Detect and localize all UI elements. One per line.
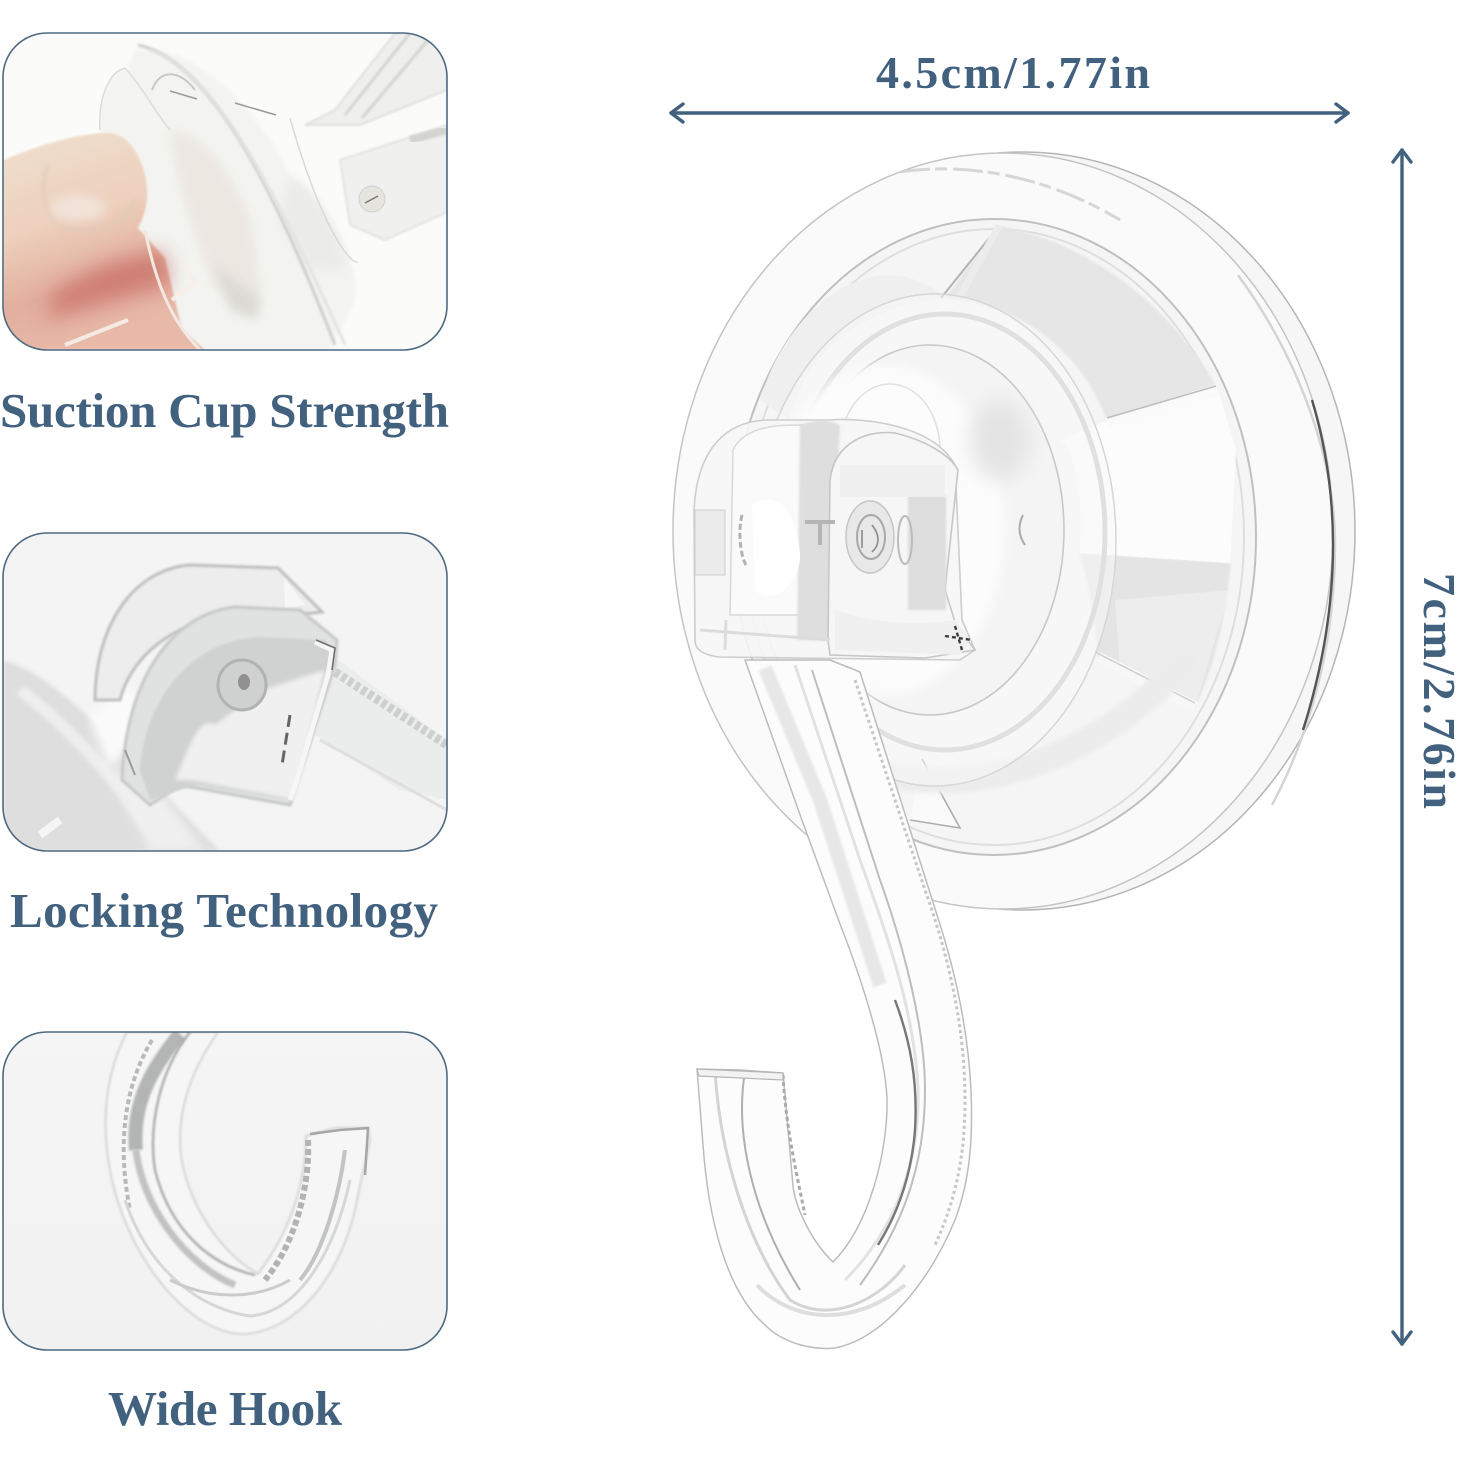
panel: wide hook <box>3 1032 447 1350</box>
dimension: width label: 4.5cm/1.77in <box>876 47 1150 98</box>
heading: locking technology: Locking Technology <box>10 883 438 938</box>
photo: finger <box>3 133 205 350</box>
arrow: height <box>1393 150 1411 1344</box>
photo: hook arm <box>315 660 447 810</box>
product: suction cup hook <box>673 152 1355 1348</box>
locking tab <box>694 420 975 660</box>
heading: suction cup strength: Suction Cup Strength <box>0 383 449 438</box>
photo: locking tab <box>95 565 337 805</box>
heading: wide hook: Wide Hook <box>108 1381 343 1436</box>
hook arm <box>697 660 972 1348</box>
photo: translucent cup body <box>100 45 358 350</box>
photo: hook arm <box>305 33 447 240</box>
panel: suction cup strength <box>3 33 447 350</box>
arrow: width <box>671 104 1348 122</box>
photo: suction cup base <box>3 660 220 851</box>
suction cup disc <box>673 152 1355 910</box>
photo: close-up of hook curve <box>106 1032 370 1334</box>
panel: locking technology <box>3 533 447 851</box>
shaded cone sectors <box>945 226 1218 421</box>
